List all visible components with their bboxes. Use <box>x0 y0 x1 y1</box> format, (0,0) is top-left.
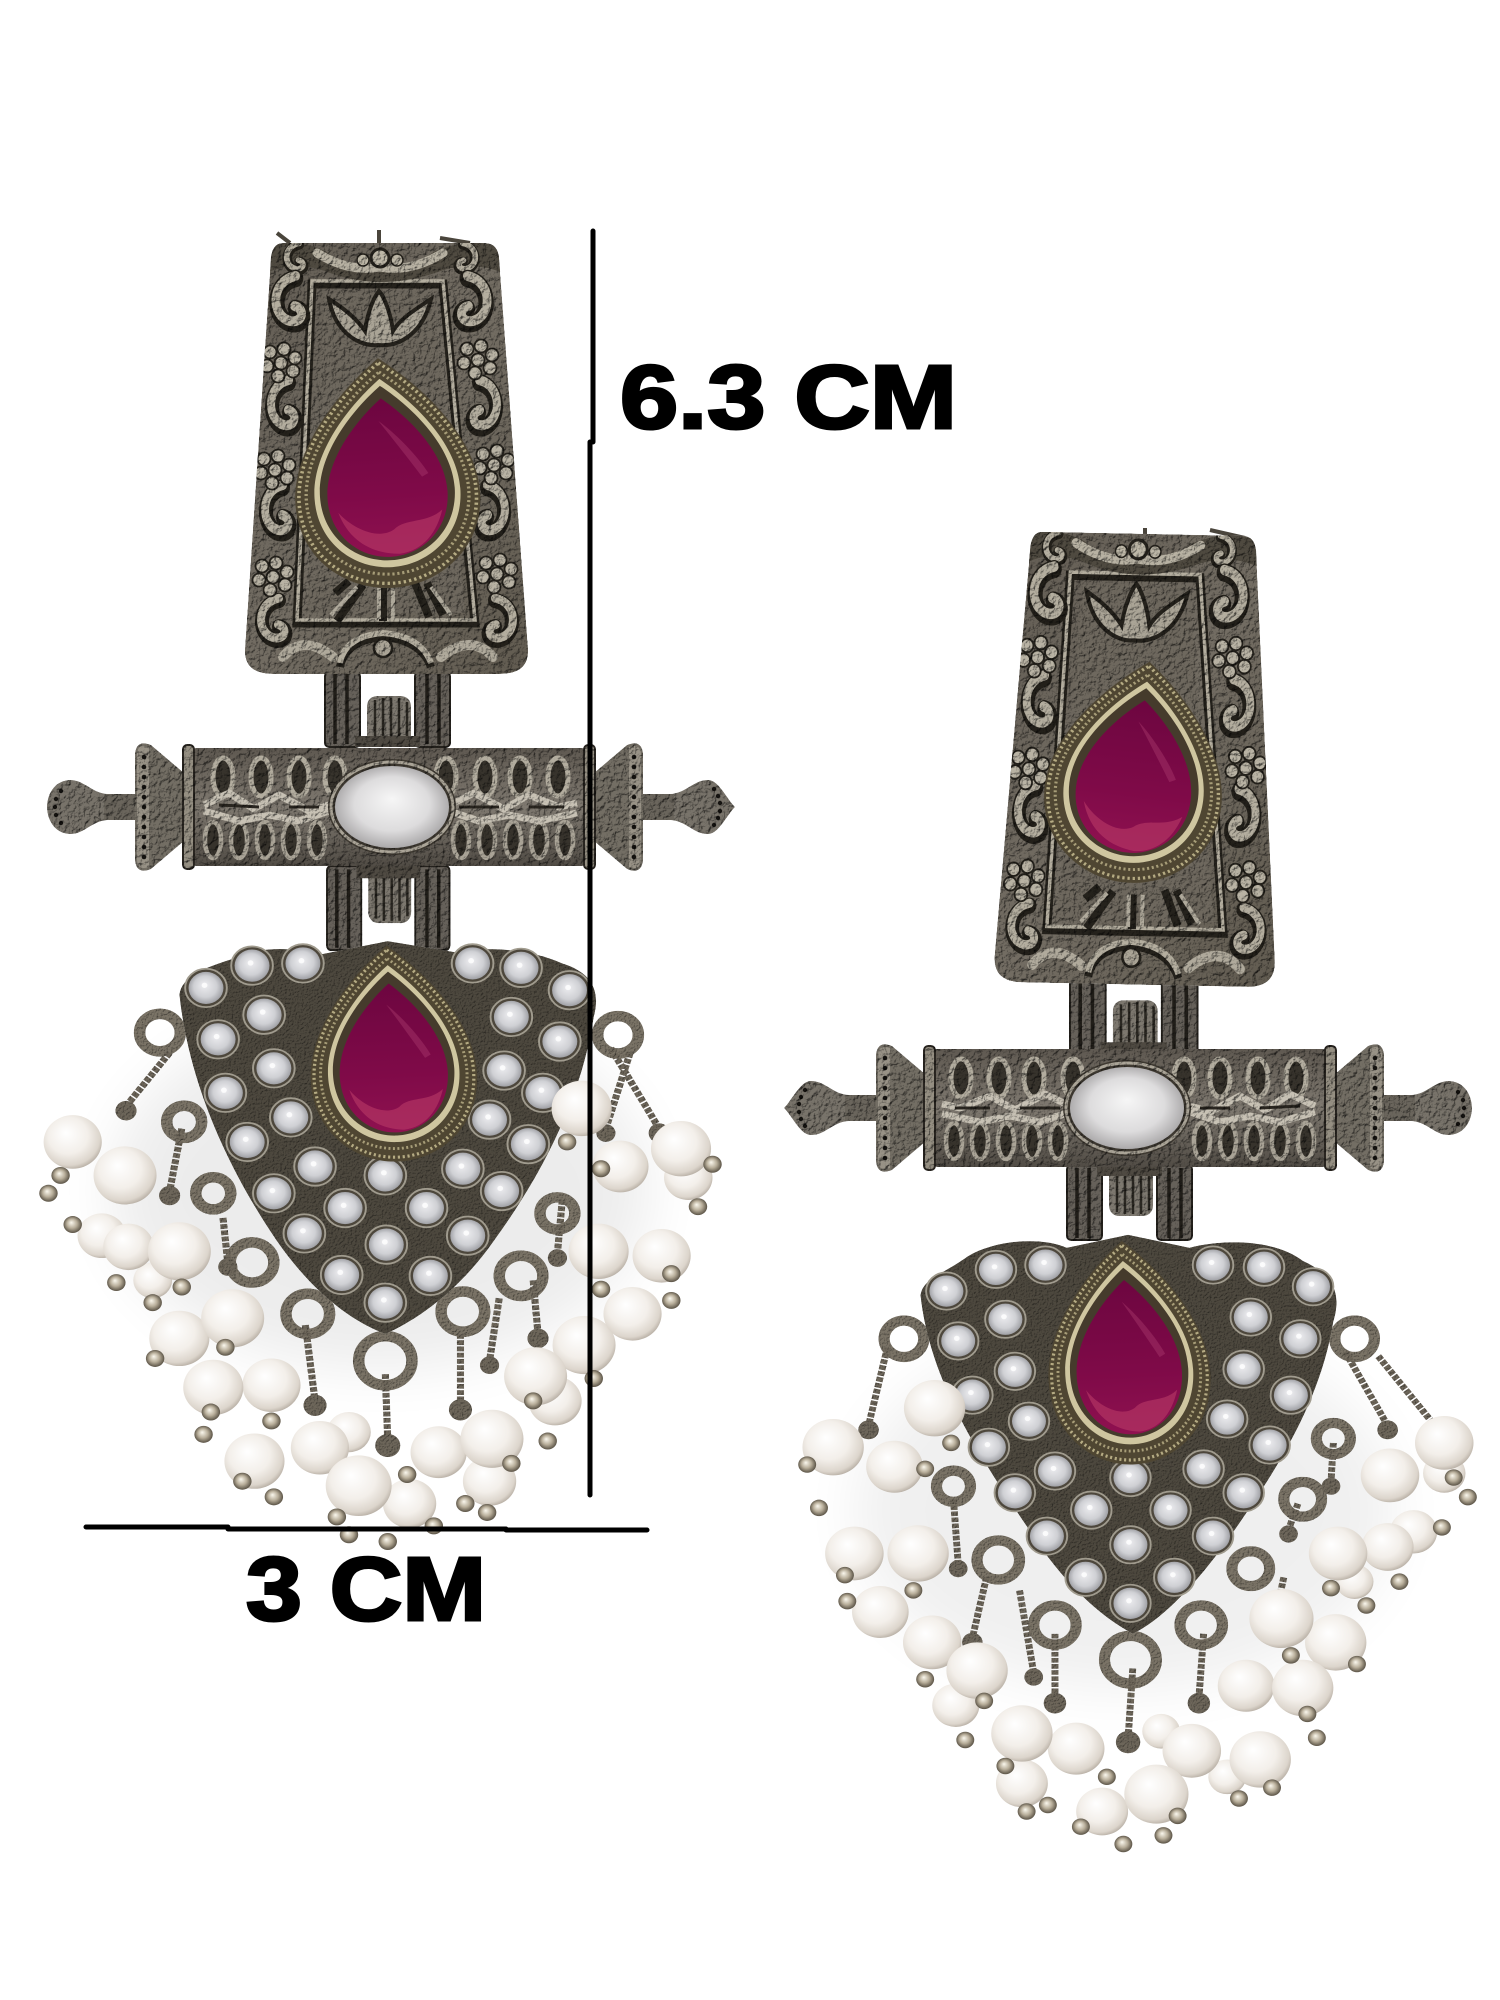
cross bar: right <box>784 1044 1472 1172</box>
soft shadow: right earring <box>855 1330 1395 1690</box>
hinge: upper left <box>325 672 450 747</box>
dimension line: height <box>590 231 593 1495</box>
gemstone: left top ruby teardrop <box>286 352 486 594</box>
pendant: left pearl shield with drops <box>39 941 722 1550</box>
pendant: right pearl shield with drops <box>798 1235 1477 1852</box>
cross bar: left <box>47 743 735 871</box>
infographic: earring dimensions <box>39 228 1477 1852</box>
label: width 3 CM: 3 CM <box>246 1540 486 1640</box>
gemstone: right pendant ruby teardrop <box>1041 1237 1215 1468</box>
gemstone: right top ruby teardrop <box>1034 651 1238 893</box>
oval pearl: left bar <box>335 766 449 848</box>
dimension line: width <box>86 1527 647 1530</box>
soft shadow: left earring <box>110 1010 650 1370</box>
hinge: lower right <box>1067 1165 1192 1240</box>
hinge: lower left <box>327 866 450 950</box>
top plate: left <box>245 230 528 674</box>
top plate: right <box>994 528 1285 987</box>
oval pearl: right bar <box>1070 1067 1184 1149</box>
plate pins: right <box>1145 528 1245 538</box>
gemstone: left pendant ruby teardrop <box>303 942 482 1165</box>
hinge: upper right <box>1070 975 1198 1054</box>
plate pins: left <box>277 230 470 243</box>
earring: right <box>784 528 1477 1852</box>
label: height 6.3 CM: 6.3 CM <box>620 348 957 448</box>
earring: left <box>39 230 735 1550</box>
